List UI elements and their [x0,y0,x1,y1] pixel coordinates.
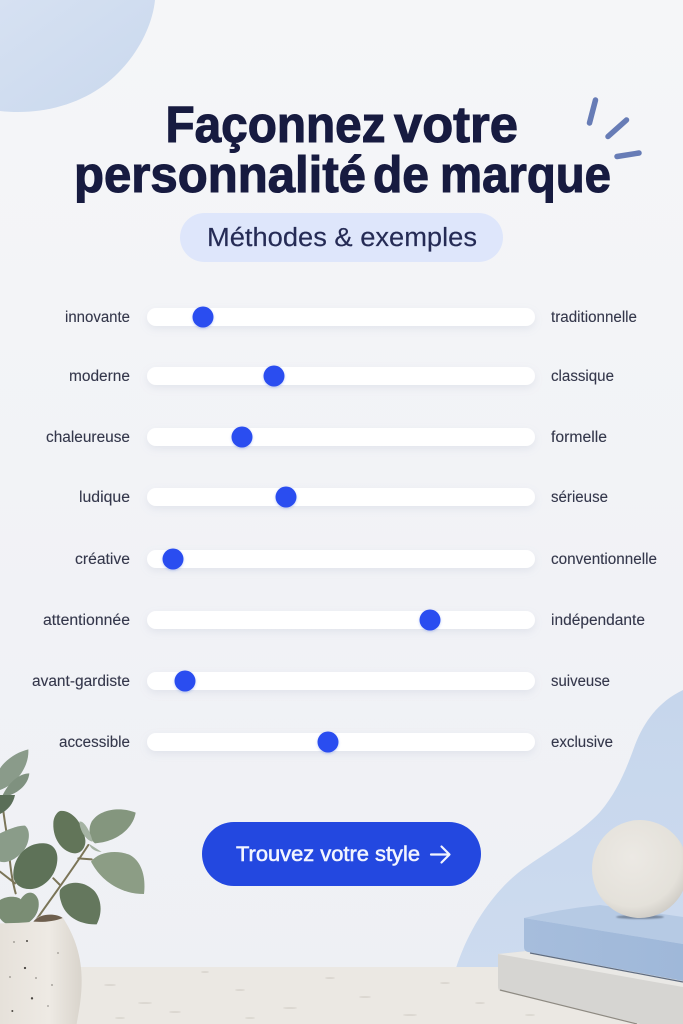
upper blue book [524,905,683,982]
lower white book [498,951,683,1024]
slider: avant-gardiste / suiveuse: suiveuse [551,673,610,690]
marble table top [0,967,683,1024]
slider: ludique / sérieuse [79,486,608,508]
slider: avant-gardiste / suiveuse: avant-gardiste [32,673,130,690]
title: personnalité [74,146,366,203]
slider list [32,306,657,752]
slider: chaleureuse / formelle [46,426,607,448]
subtitle pill [180,213,503,262]
slider: attentionnée / indépendante: indépendante [551,612,645,629]
slider: attentionnée / indépendante [43,610,645,630]
leaves [0,749,144,927]
slider: accessible / exclusive [59,732,613,752]
title: marque [440,146,611,203]
slider: ludique / sérieuse: sérieuse [551,489,608,506]
stems [0,797,92,922]
icon: arrow [431,846,450,862]
title [74,96,611,203]
slider: innovante / traditionnelle: traditionnelle [551,309,637,326]
slider: chaleureuse / formelle: chaleureuse [46,429,130,446]
slider: moderne / classique: moderne [69,368,130,385]
subtitle pill: Méthodes & exemples [207,224,477,252]
slider: créative / conventionnelle: créative [75,551,130,568]
title: Façonnez [166,96,386,153]
title: votre [394,96,518,153]
slider: innovante / traditionnelle [65,306,637,328]
decorative blob: top left [0,0,155,112]
call-to-action button [202,822,481,886]
call-to-action button: Trouvez votre style [236,843,420,866]
slider: créative / conventionnelle: conventionnelle [551,551,657,568]
plant in vase [0,749,144,1024]
stacked books [498,905,683,1024]
slider: chaleureuse / formelle: formelle [551,429,607,446]
stone sphere [592,820,683,919]
slider: créative / conventionnelle [75,548,657,570]
icon: sparkle lines [590,100,639,156]
title: de [373,146,429,203]
slider: accessible / exclusive: exclusive [551,734,613,751]
slider: ludique / sérieuse: ludique [79,489,130,506]
slider: innovante / traditionnelle: innovante [65,309,130,326]
slider: accessible / exclusive: accessible [59,734,130,751]
vase [0,914,82,1024]
slider: avant-gardiste / suiveuse [32,670,610,692]
decorative blob: bottom right [456,690,683,968]
slider: moderne / classique [69,366,614,386]
slider: attentionnée / indépendante: attentionnée [43,612,130,629]
slider: moderne / classique: classique [551,368,614,385]
